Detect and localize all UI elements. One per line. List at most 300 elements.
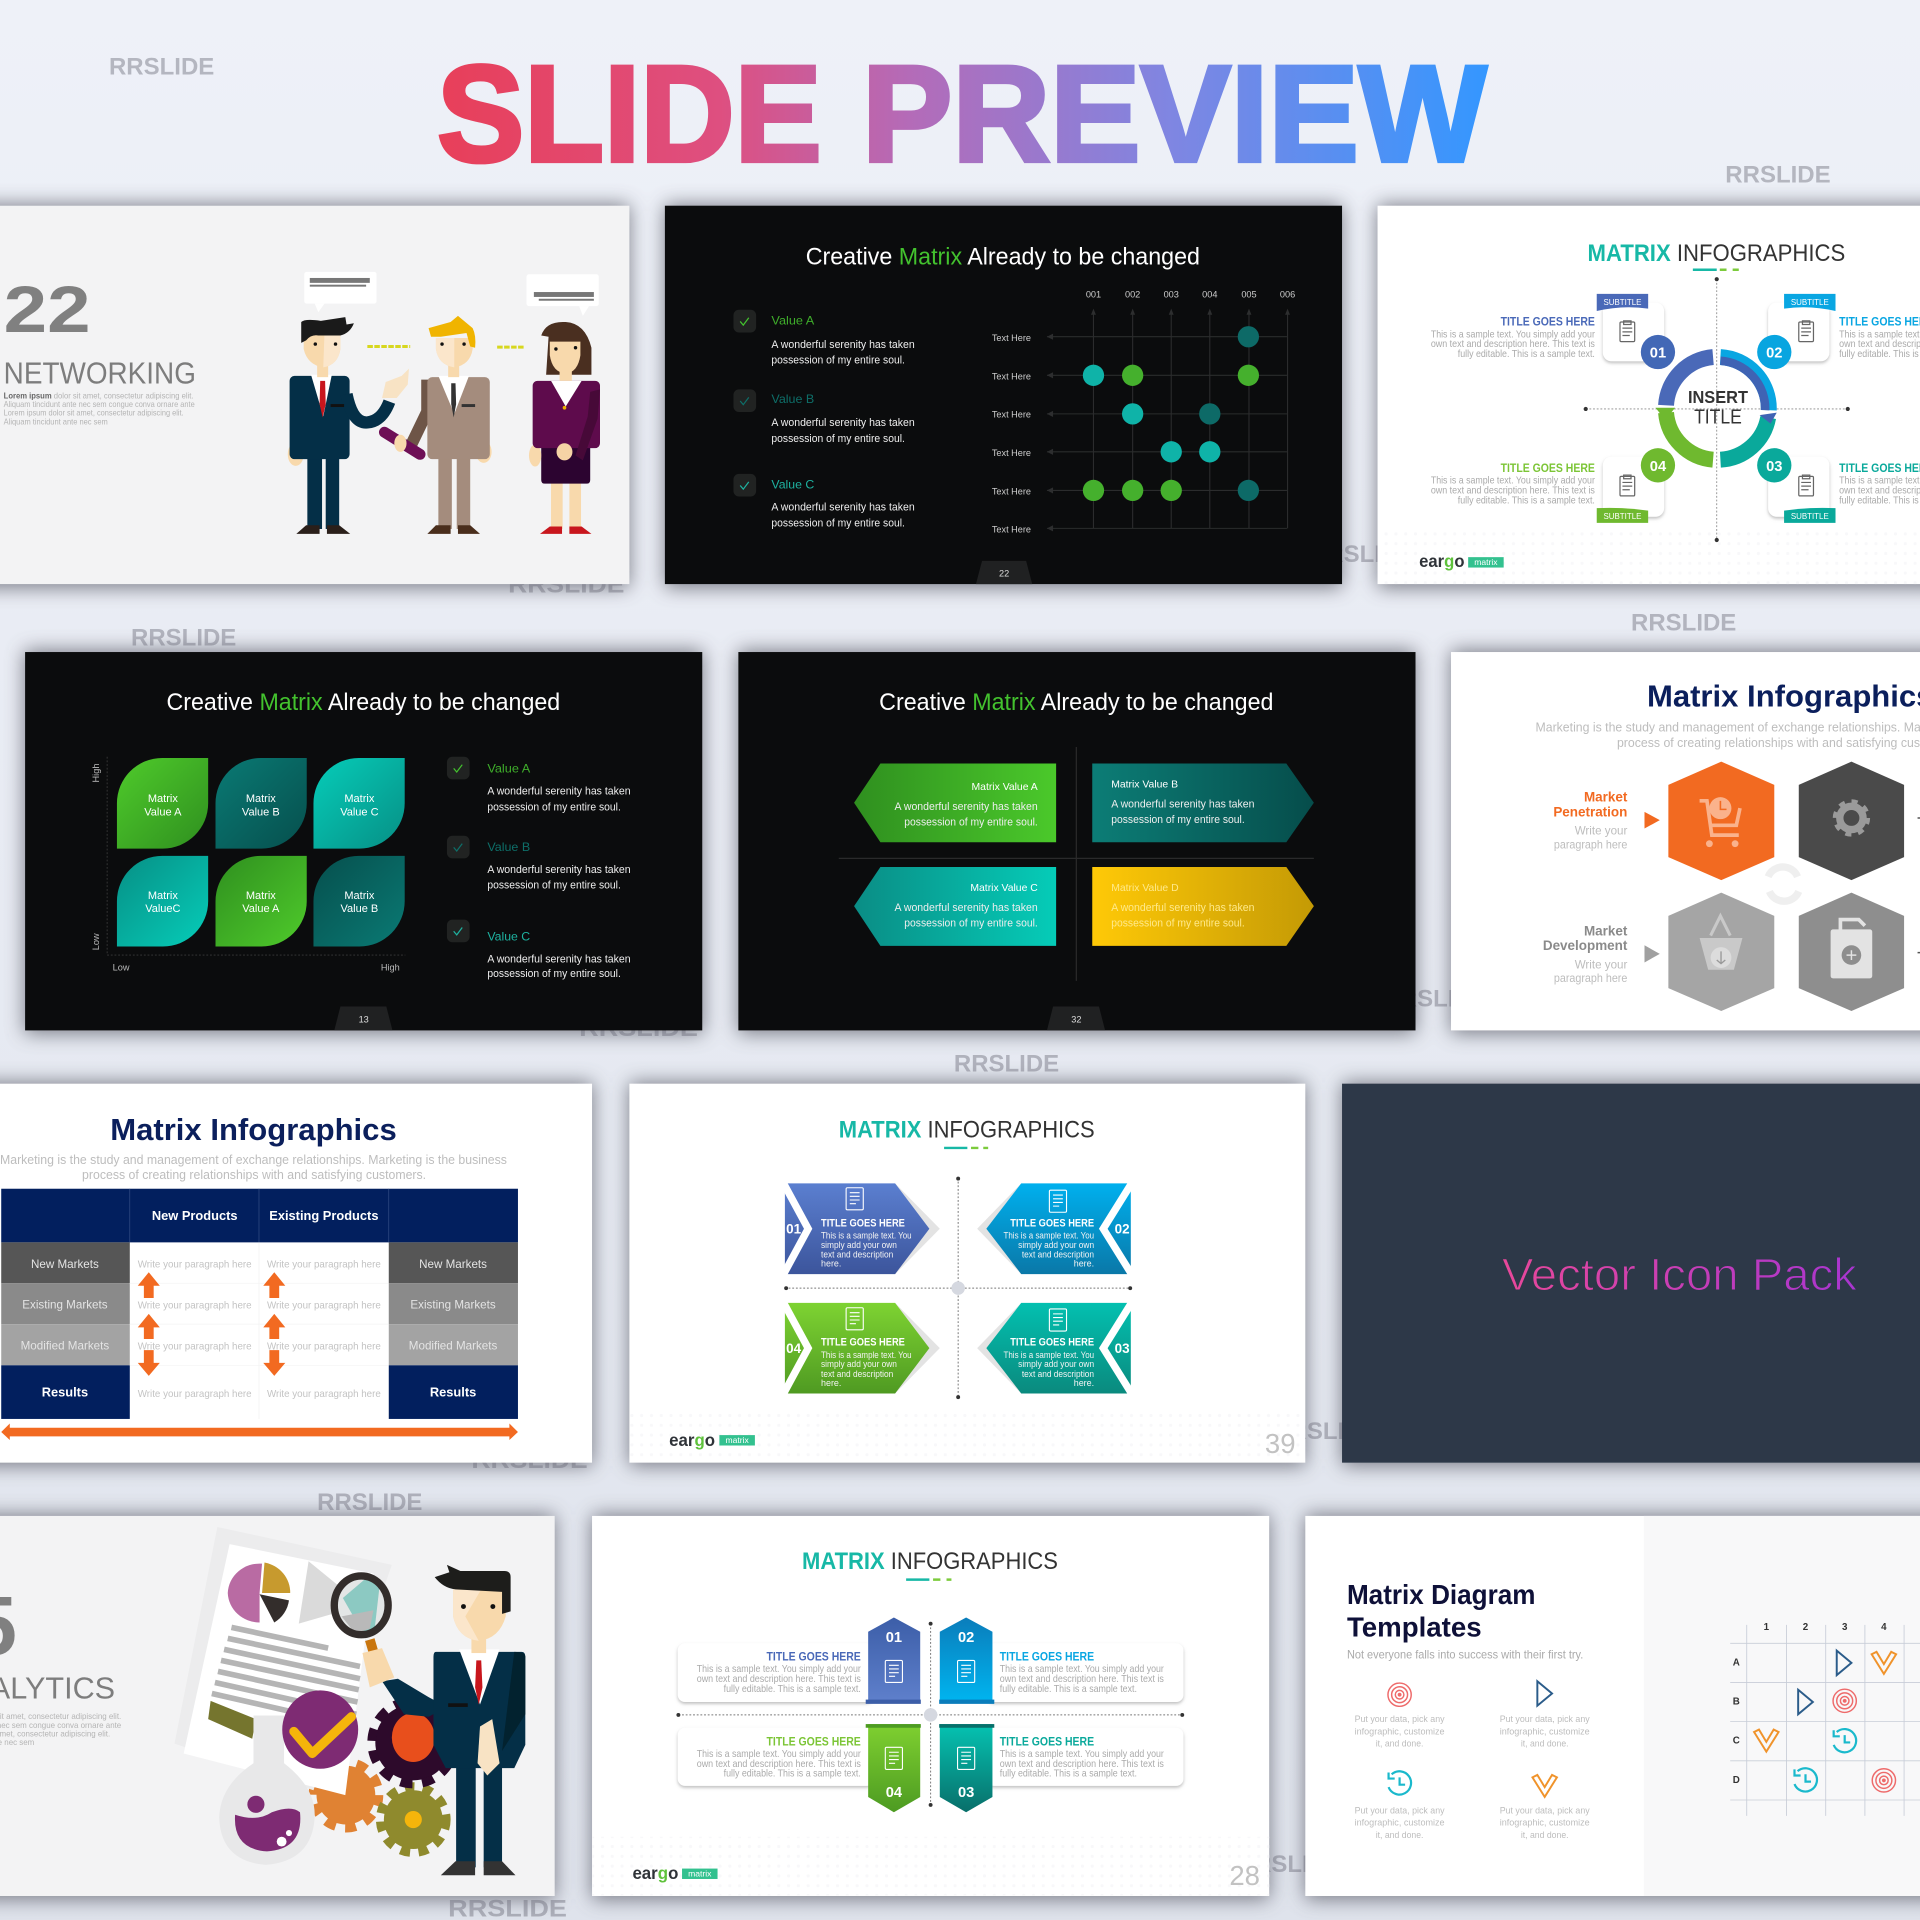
subtitle: [0, 1152, 507, 1182]
matrix leaves: Value A: [242, 903, 280, 915]
card 04: fully editable. This is a sample text.: [724, 1769, 861, 1780]
legend: triangle: Put your data, pick any: [1500, 1714, 1590, 1725]
text block 04: TITLE GOES HERE: [1501, 462, 1595, 475]
step card 04: 04: [1650, 459, 1667, 475]
step card 02: [1757, 294, 1836, 369]
subtitle: process of creating relationships with and satisfying customers.: [82, 1167, 426, 1182]
logo: eargo: [1419, 551, 1464, 571]
magnifying glass: [334, 1576, 388, 1681]
value list: possession of my entire soul.: [771, 518, 905, 530]
page tab 32: 32: [1071, 1014, 1081, 1024]
orange arrows column 1: [138, 1272, 160, 1376]
table: Write your paragraph here: [138, 1259, 252, 1270]
arrow C: A wonderful serenity has taken: [894, 902, 1038, 914]
arrow B: Matrix Value B: [1111, 779, 1178, 790]
recycle icon: [1768, 867, 1799, 901]
watermarks: RRSLIDE: [1272, 1418, 1378, 1445]
dot matrix chart: Text Here: [992, 410, 1031, 420]
lorem text block: [0, 1712, 122, 1747]
watermarks: RRSLIDE: [471, 1447, 588, 1474]
matrix leaves: ValueC: [145, 903, 181, 915]
arrow card 01: This is a sample text. You: [821, 1231, 912, 1241]
arrow A: possession of my entire soul.: [904, 816, 1038, 828]
card 04: TITLE GOES HERE: [767, 1736, 861, 1749]
olive gear: [380, 1787, 446, 1853]
card 03: 03: [958, 1785, 974, 1801]
text block 01: fully editable. This is a sample text.: [1458, 349, 1595, 360]
card 04: [678, 1724, 921, 1812]
heading: Matrix Diagram: [1347, 1579, 1536, 1610]
arrow card 04: 04: [786, 1341, 802, 1356]
table: Write your paragraph here: [138, 1389, 252, 1400]
chart axes: Low: [113, 962, 130, 972]
matrix leaves: Matrix: [246, 793, 276, 805]
arrow card 02: TITLE GOES HERE: [1010, 1217, 1094, 1229]
watermarks: RRSLIDE: [1309, 541, 1414, 568]
text block 04: fully editable. This is a sample text.: [1458, 495, 1595, 506]
arrow card 03: [977, 1296, 1136, 1400]
lorem text block: Lorem ipsum dolor sit amet, consectetur adipiscing elit.: [4, 392, 193, 401]
panel: matrix table slide: [0, 1084, 592, 1463]
value list: Value B: [487, 840, 530, 854]
card 01: own text and description here. This text is: [697, 1674, 861, 1685]
value list: possession of my entire soul.: [487, 879, 621, 891]
card 03: own text and description here. This text is: [1000, 1759, 1164, 1770]
value list: A wonderful serenity has taken: [487, 864, 631, 876]
matrix leaves: Matrix: [148, 890, 178, 902]
value list: Value B: [771, 392, 814, 406]
text block 04: This is a sample text. You simply add your: [1431, 476, 1596, 487]
arrow card 01: 01: [786, 1222, 802, 1237]
watermarks: RRSLIDE: [1631, 610, 1736, 637]
heading: MATRIX INFOGRAPHICS: [839, 1117, 1095, 1144]
legend: clock: infographic, customize: [1355, 1818, 1445, 1829]
page number: 39: [1265, 1428, 1296, 1459]
lorem text block: Lorem ipsum dolor sit amet, consectetur adipiscing elit.: [4, 409, 184, 418]
dot matrix chart: [992, 290, 1295, 535]
matrix leaves: Value A: [144, 807, 182, 819]
panel: dark matrix dot chart slide: [665, 206, 1342, 584]
heading: Templates: [1347, 1612, 1482, 1643]
table: Write your paragraph here: [267, 1341, 381, 1352]
step card 03: SUBTITLE: [1791, 512, 1829, 521]
text block 01: own text and description here. This text is: [1431, 339, 1595, 350]
value list: possession of my entire soul.: [487, 802, 621, 814]
arrow card 01: text and description: [821, 1250, 893, 1260]
arrow A: [854, 763, 1056, 842]
title: PREVIEW: [862, 38, 1487, 191]
card 01: fully editable. This is a sample text.: [724, 1684, 861, 1695]
heading: networking: NETWORKING: [4, 356, 196, 390]
table: Existing Markets: [22, 1298, 108, 1311]
table: New Markets: [419, 1258, 487, 1271]
arrow C: [854, 867, 1056, 946]
speech bubble right: [527, 274, 599, 316]
table: Existing Products: [269, 1208, 378, 1223]
arrow card 04: TITLE GOES HERE: [821, 1337, 905, 1349]
matrix grid: C: [1733, 1736, 1740, 1747]
arrow card 02: here.: [1074, 1259, 1094, 1269]
panel: networking illustration slide: [0, 206, 629, 584]
watermarks: RRSLIDE: [508, 572, 624, 599]
text block 03: [1839, 462, 1920, 506]
arrow card 02: 02: [1115, 1222, 1130, 1237]
figure: analyst: [362, 1565, 525, 1875]
title: [437, 38, 1487, 191]
heading: MATRIX INFOGRAPHICS: [1588, 240, 1845, 267]
card 04: own text and description here. This text is: [697, 1759, 861, 1770]
arrow card 01: [780, 1177, 940, 1281]
heading: Creative Matrix Already to be changed: [806, 243, 1200, 270]
heading underline: [906, 1579, 951, 1581]
card 04: This is a sample text. You simply add your: [697, 1749, 861, 1760]
heading: Vector Icon Pack: [1502, 1249, 1857, 1300]
step card 01: SUBTITLE: [1603, 298, 1641, 307]
dot matrix chart: Text Here: [992, 333, 1031, 343]
arrow card 03: simply add your own: [1018, 1359, 1094, 1369]
legend: target: it, and done.: [1376, 1739, 1423, 1750]
value list: A wonderful serenity has taken: [487, 953, 631, 965]
arrow card 03: 03: [1115, 1341, 1130, 1356]
watermarks: RRSLIDE: [1382, 986, 1488, 1013]
watermarks: RRSLIDE: [109, 54, 214, 81]
value list: A wonderful serenity has taken: [771, 339, 915, 351]
pie chart: [228, 1562, 290, 1622]
value list: possession of my entire soul.: [771, 433, 905, 445]
arrow card 02: text and description: [1022, 1250, 1094, 1260]
page tab 22: 22: [999, 569, 1009, 579]
heading underline: [944, 1147, 988, 1149]
page tab 13: [334, 1007, 392, 1030]
table: Write your paragraph here: [138, 1300, 252, 1311]
card 02: 02: [958, 1630, 974, 1646]
arrow card 01: simply add your own: [821, 1240, 897, 1250]
heading: Creative Matrix Already to be changed: [167, 689, 560, 716]
panel: hexagon matrix slide: [1451, 652, 1920, 1030]
label: market development: paragraph here: [1554, 972, 1627, 985]
step card 04: [1597, 448, 1675, 523]
figure: man in navy suit: [288, 317, 409, 534]
heading: Creative Matrix Already to be changed: [879, 689, 1273, 716]
arrow D: A wonderful serenity has taken: [1111, 902, 1254, 914]
title: SLIDE: [437, 38, 822, 191]
legend: chevrons: infographic, customize: [1500, 1818, 1590, 1829]
matrix grid: A: [1733, 1657, 1740, 1668]
arrow card 02: simply add your own: [1018, 1240, 1094, 1250]
panel: analytics illustration slide: [0, 1516, 555, 1896]
card 01: TITLE GOES HERE: [767, 1650, 861, 1663]
page tab 32: [1047, 1007, 1105, 1030]
lorem text block: [4, 392, 195, 426]
page tab 22: [976, 561, 1032, 584]
value list: possession of my entire soul.: [771, 355, 905, 367]
subtitle: Marketing is the study and management of exchange relationships. Marketing is the business: [0, 1152, 507, 1167]
arrow card 04: simply add your own: [821, 1359, 897, 1369]
dot matrix chart: 003: [1164, 290, 1179, 300]
step card 02: 02: [1766, 346, 1782, 362]
watermarks: RRSLIDE: [131, 624, 236, 651]
table: Write your paragraph here: [267, 1259, 381, 1270]
cycle ring: [1656, 357, 1777, 460]
dot matrix chart: 001: [1086, 290, 1101, 300]
dashed links: [367, 345, 524, 348]
dot matrix chart: 004: [1202, 290, 1217, 300]
label: market penetration: paragraph here: [1554, 839, 1627, 852]
arrow B: A wonderful serenity has taken: [1111, 799, 1254, 811]
logo: matrix: [688, 1869, 712, 1879]
dot matrix chart: 002: [1125, 290, 1140, 300]
page number: 28: [1229, 1860, 1260, 1891]
label: market penetration: Write your: [1575, 824, 1627, 837]
card 02: [939, 1618, 1183, 1704]
axes: [676, 1622, 1184, 1807]
legend: chevrons: it, and done.: [1521, 1830, 1569, 1841]
card 01: This is a sample text. You simply add your: [697, 1664, 861, 1675]
arrow A: A wonderful serenity has taken: [894, 801, 1038, 813]
heading: Matrix Infographics: [110, 1113, 397, 1147]
table: Results: [430, 1385, 476, 1400]
figure: woman in purple: [529, 322, 600, 534]
arrow D: possession of my entire soul.: [1111, 917, 1245, 929]
legend: triangle: [1500, 1681, 1590, 1750]
text block 01: This is a sample text. You simply add your: [1431, 329, 1596, 340]
value list: possession of my entire soul.: [487, 968, 621, 980]
legend: chevrons: [1500, 1775, 1590, 1841]
matrix leaves: Value B: [242, 807, 280, 819]
page tab 13: 13: [359, 1014, 369, 1024]
label: market penetration: [1553, 789, 1628, 852]
card 02: TITLE GOES HERE: [1000, 1650, 1094, 1663]
hexagon: orange cart: [1668, 762, 1774, 880]
matrix grid: 3: [1842, 1622, 1848, 1633]
table: Write your paragraph here: [138, 1341, 252, 1352]
watermarks: RRSLIDE: [317, 1489, 422, 1516]
legend: clock: [1355, 1771, 1445, 1841]
axes: [1584, 277, 1850, 542]
wide double arrow: [1, 1423, 518, 1440]
text block 01: [1431, 316, 1596, 360]
dot matrix chart: Text Here: [992, 487, 1031, 497]
text block 02: [1839, 316, 1920, 360]
watermarks: RRSLIDE: [1725, 161, 1831, 188]
value list: [733, 310, 915, 530]
step card 01: 01: [1650, 346, 1666, 362]
text block 04: own text and description here. This text is: [1431, 485, 1595, 496]
arrow D: Matrix Value D: [1111, 883, 1179, 894]
step card 04: SUBTITLE: [1603, 512, 1641, 521]
value list: Value A: [771, 313, 815, 327]
card 03: TITLE GOES HERE: [1000, 1736, 1094, 1749]
check badge: [282, 1690, 358, 1769]
matrix grid: 1: [1764, 1622, 1770, 1633]
watermarks: RRSLIDE: [954, 1050, 1059, 1077]
matrix grid: [1730, 1622, 1920, 1816]
hexagon: dark gear: [1799, 762, 1904, 880]
table: New Products: [152, 1208, 238, 1223]
step card 03: [1757, 448, 1836, 523]
hexagon: grey basket: [1668, 893, 1774, 1011]
panel: ribbon matrix infographic slide: [592, 1516, 1269, 1896]
panel: circular matrix infographic slide: [1378, 206, 1920, 584]
arrow B: possession of my entire soul.: [1111, 814, 1245, 826]
table: Write your paragraph here: [267, 1300, 381, 1311]
card 02: fully editable. This is a sample text.: [1000, 1684, 1137, 1695]
logo: [669, 1430, 755, 1450]
value list: Value C: [771, 478, 814, 492]
dot matrix chart: 005: [1241, 290, 1257, 300]
card 04: 04: [886, 1785, 903, 1801]
dark gear: [372, 1701, 455, 1784]
value list: A wonderful serenity has taken: [771, 502, 915, 514]
logo: matrix: [1474, 557, 1498, 567]
lorem text block: Aliquam tincidunt ante nec sem: [4, 417, 108, 426]
matrix leaves: Value B: [341, 903, 378, 915]
table: Modified Markets: [21, 1339, 109, 1352]
panel: four arrow infographic slide: [629, 1084, 1305, 1463]
card 03: [939, 1724, 1183, 1812]
card 03: fully editable. This is a sample text.: [1000, 1769, 1137, 1780]
matrix leaves: [117, 758, 405, 947]
label: market development: Write your: [1575, 959, 1627, 972]
chart axes: [91, 757, 405, 972]
subtitle: [1536, 720, 1920, 750]
label: market development: Development: [1543, 938, 1628, 953]
value list: [447, 757, 631, 980]
arrow card 04: [780, 1296, 940, 1400]
ring centre label: [1688, 387, 1748, 429]
matrix grid: D: [1733, 1775, 1740, 1786]
lorem text block: Aliquam tincidunt ante nec sem congue conva ornare ante: [4, 400, 195, 409]
arrow card 04: here.: [821, 1378, 841, 1388]
arrow card 02: [977, 1177, 1136, 1281]
arrow card 03: TITLE GOES HERE: [1010, 1337, 1094, 1349]
legend: clock: it, and done.: [1376, 1830, 1423, 1841]
step card 02: SUBTITLE: [1791, 298, 1829, 307]
figure: man in tan suit: [384, 316, 492, 534]
label: market development: Market: [1584, 924, 1628, 939]
text block 04: [1431, 462, 1596, 506]
value list: A wonderful serenity has taken: [771, 417, 915, 429]
chart axes: High: [381, 962, 400, 972]
heading underline: [1693, 269, 1739, 271]
arrow D: [1092, 867, 1314, 946]
panel: arrow matrix slide: [738, 652, 1416, 1030]
label: market penetration: Penetration: [1553, 805, 1627, 820]
arrow C: Matrix Value C: [970, 883, 1038, 894]
matrix leaves: Matrix: [344, 890, 375, 902]
card 01: 01: [886, 1630, 902, 1646]
value list: A wonderful serenity has taken: [487, 786, 631, 798]
dot matrix chart: Text Here: [992, 448, 1031, 458]
dot matrix chart: 006: [1280, 290, 1295, 300]
matrix grid: B: [1733, 1696, 1740, 1707]
arrow card 03: text and description: [1022, 1369, 1094, 1379]
card 02: own text and description here. This text is: [1000, 1674, 1164, 1685]
ring centre label: INSERT: [1688, 387, 1748, 407]
value list: Value A: [487, 762, 531, 776]
matrix leaves: Matrix: [344, 793, 375, 805]
subtitle: Not everyone falls into success with their first try.: [1347, 1649, 1583, 1662]
legend: target: infographic, customize: [1355, 1726, 1445, 1737]
logo: [632, 1863, 718, 1883]
arrow card 04: This is a sample text. You: [821, 1350, 912, 1360]
arrow C: possession of my entire soul.: [904, 917, 1038, 929]
legend: triangle: it, and done.: [1521, 1739, 1569, 1750]
arrow B: [1092, 763, 1314, 842]
matrix leaves: Value C: [340, 807, 379, 819]
arrow A: Matrix Value A: [972, 782, 1038, 793]
card 02: This is a sample text. You simply add your: [1000, 1664, 1165, 1675]
dot matrix chart: Text Here: [992, 525, 1031, 535]
orange arrows column 2: [263, 1272, 285, 1376]
value list: Value C: [487, 929, 530, 943]
legend: target: Put your data, pick any: [1355, 1714, 1445, 1725]
label: market penetration: Market: [1584, 789, 1628, 804]
arrow card 03: This is a sample text. You: [1003, 1350, 1094, 1360]
arrow card 02: This is a sample text. You: [1003, 1231, 1094, 1241]
dot matrix chart: Text Here: [992, 372, 1031, 382]
flask: [219, 1716, 315, 1865]
logo: matrix: [725, 1435, 750, 1445]
logo: eargo: [632, 1863, 678, 1883]
arrow card 01: TITLE GOES HERE: [821, 1217, 905, 1229]
logo: eargo: [669, 1430, 715, 1450]
watermarks: RRSLIDE: [1237, 1851, 1342, 1878]
matrix grid: 4: [1881, 1622, 1887, 1633]
document illustration: [174, 1527, 392, 1795]
step card 01: [1597, 294, 1675, 369]
table: Modified Markets: [409, 1339, 498, 1352]
legend: target: [1355, 1683, 1445, 1750]
panel: leaf matrix slide: [25, 652, 702, 1030]
logo: [1419, 551, 1504, 571]
legend: triangle: infographic, customize: [1500, 1726, 1590, 1737]
legend: chevrons: Put your data, pick any: [1500, 1805, 1590, 1816]
legend: clock: Put your data, pick any: [1355, 1805, 1445, 1816]
heading: MATRIX INFOGRAPHICS: [802, 1548, 1058, 1575]
card 03: This is a sample text. You simply add your: [1000, 1749, 1165, 1760]
table: Write your paragraph here: [267, 1389, 381, 1400]
arrow card 01: here.: [821, 1259, 841, 1269]
matrix leaves: Matrix: [148, 793, 178, 805]
step card 03: 03: [1766, 459, 1782, 475]
hexagon: grey bag: [1799, 893, 1904, 1011]
text block 01: TITLE GOES HERE: [1501, 316, 1595, 329]
matrix leaves: Matrix: [246, 890, 276, 902]
ring centre label: TITLE: [1694, 407, 1742, 429]
table: Results: [42, 1385, 88, 1400]
pointer triangles: [1644, 812, 1920, 962]
heading: [1347, 1579, 1536, 1643]
card 01: [678, 1618, 921, 1704]
slide number 22: 22: [4, 273, 91, 347]
orange gear: [313, 1762, 379, 1828]
watermarks: RRSLIDE: [579, 1015, 698, 1042]
panel: matrix diagram templates slide: [1305, 1516, 1920, 1896]
table: Existing Markets: [410, 1298, 496, 1311]
table: [1, 1189, 518, 1419]
axes: [784, 1177, 1132, 1399]
chart axes: Low: [91, 933, 101, 950]
table: New Markets: [31, 1258, 99, 1271]
matrix grid: 2: [1803, 1622, 1809, 1633]
chart axes: High: [91, 764, 101, 782]
arrow card 03: here.: [1074, 1378, 1094, 1388]
arrow card 04: text and description: [821, 1369, 893, 1379]
speech bubble left: [304, 272, 377, 312]
label: market development: [1543, 924, 1628, 985]
panel: vector icon pack slide: [1342, 1084, 1920, 1463]
